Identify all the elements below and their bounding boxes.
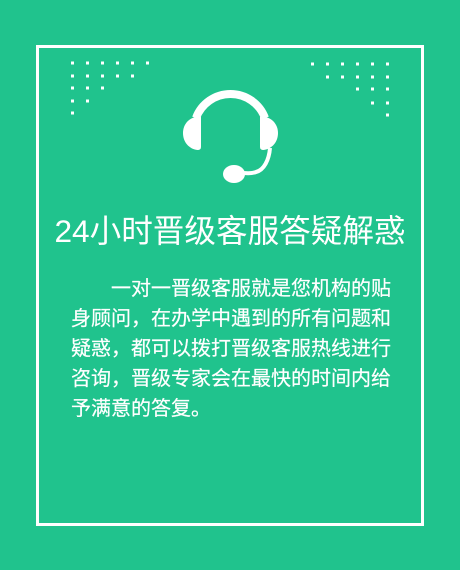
text block: description: 一对一晋级客服就是您机构的贴 — [111, 278, 391, 300]
text block: description: 予满意的答复。 — [71, 398, 211, 420]
text block: description: 疑惑，都可以拨打晋级客服热线进行 — [71, 338, 391, 360]
text block: description: 咨询，晋级专家会在最快的时间内给 — [71, 368, 391, 390]
text block: description: 身顾问，在办学中遇到的所有问题和 — [71, 308, 391, 330]
icon: headset — [183, 90, 278, 183]
icon: dot pattern top right — [311, 62, 389, 116]
text block: description — [71, 278, 391, 420]
icon: dot pattern top left — [71, 62, 149, 114]
panel: white border frame — [36, 45, 424, 526]
title: 24小时晋级客服答疑解惑 — [54, 213, 406, 249]
